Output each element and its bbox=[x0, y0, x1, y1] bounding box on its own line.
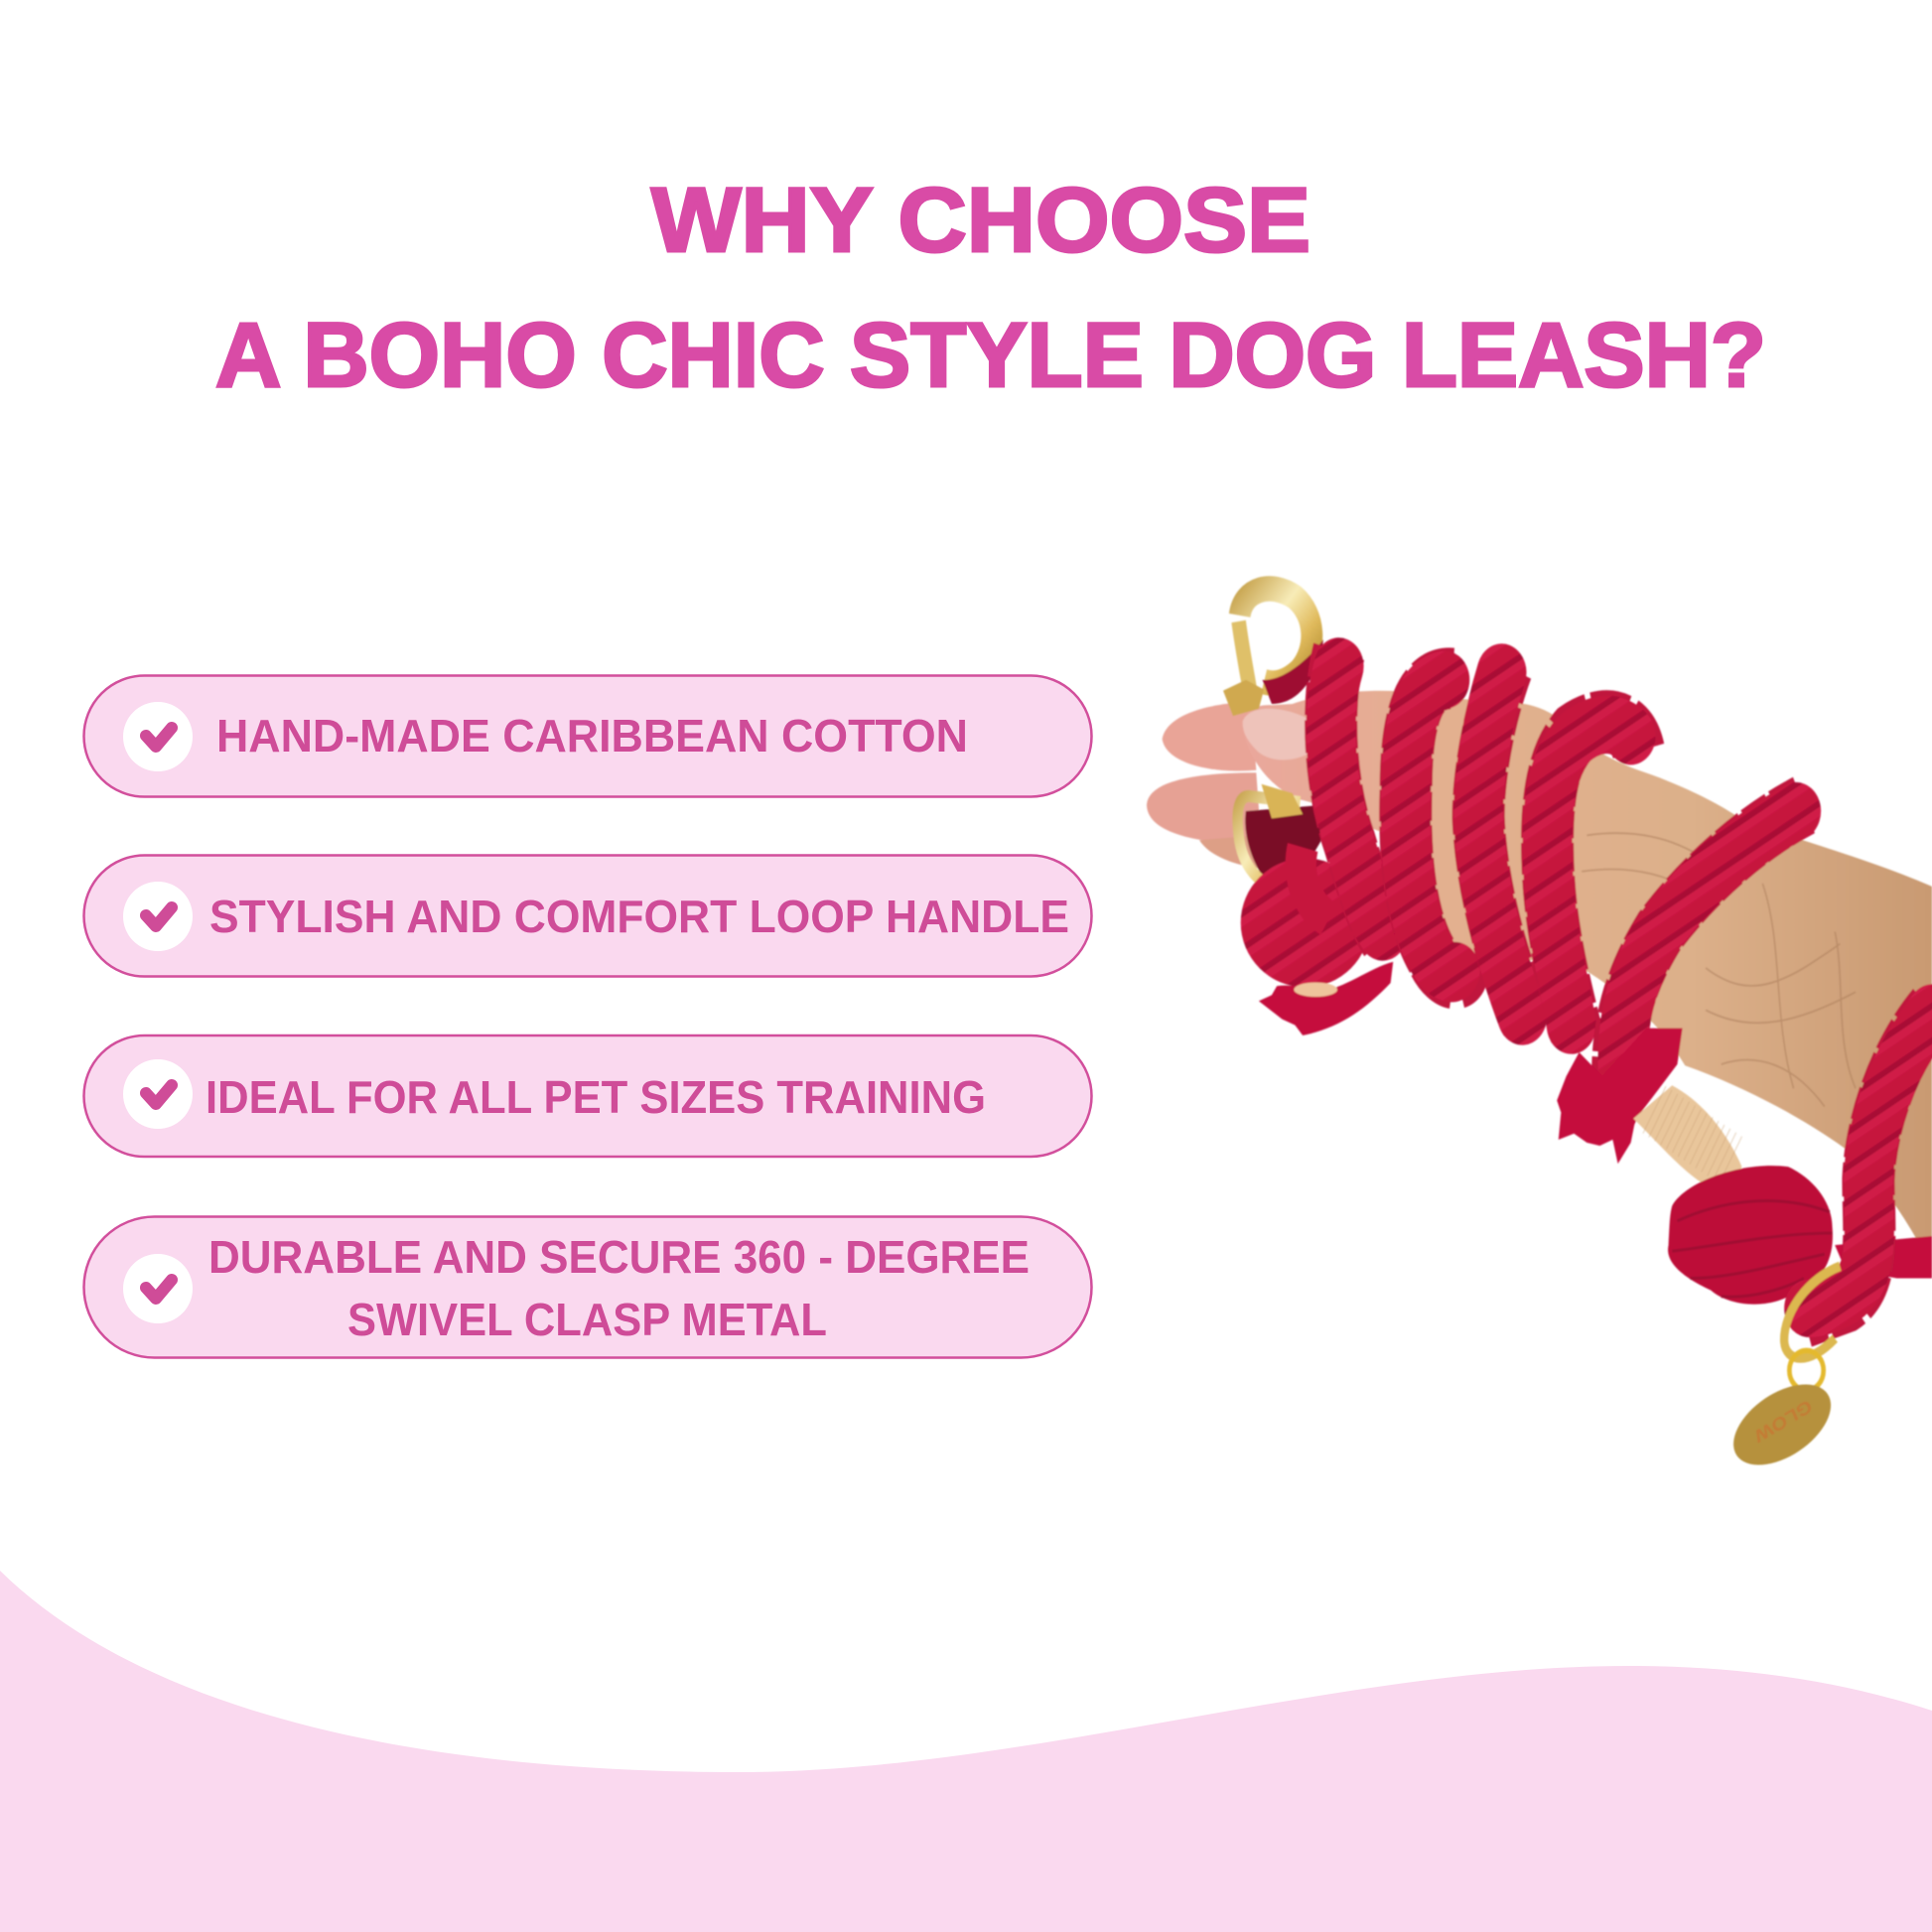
gold ring and tag bbox=[1723, 1266, 1842, 1481]
benefit pill: loop handle bbox=[83, 856, 1092, 977]
rope coil 1 bbox=[1331, 651, 1385, 938]
rope coil 5 over wrist bbox=[1618, 805, 1804, 1076]
rope coil 4 bbox=[1548, 721, 1638, 1035]
swivel D ring bbox=[1238, 784, 1320, 893]
benefit pill: cotton bbox=[83, 675, 1092, 796]
title: WHY CHOOSE bbox=[651, 170, 1311, 271]
wrinkles bbox=[1582, 833, 1856, 1107]
rope right strand bbox=[1804, 1010, 1932, 1317]
panel: benefits list bbox=[83, 675, 1092, 1358]
benefit pill: all pet sizes: IDEAL FOR ALL PET SIZES TRAINING bbox=[206, 1071, 986, 1123]
rope coil 3 bbox=[1478, 666, 1528, 1023]
benefit pill: swivel clasp: SWIVEL CLASP METAL bbox=[347, 1294, 827, 1345]
title bbox=[215, 170, 1766, 406]
rope loop left knot bbox=[1241, 848, 1393, 1035]
snap clasp bbox=[1223, 589, 1323, 716]
benefit pill: cotton: HAND-MADE CARIBBEAN COTTON bbox=[216, 710, 968, 761]
background wave bbox=[0, 1571, 1932, 1932]
thumbnail bbox=[1243, 709, 1313, 759]
rope coil 2 bbox=[1406, 678, 1462, 978]
cord wrap bbox=[1633, 1085, 1741, 1192]
hand and wrist bbox=[1147, 691, 1932, 1266]
gold ring and tag: GLOW bbox=[1751, 1396, 1815, 1447]
benefit pill: loop handle: STYLISH AND COMFORT LOOP HANDLE bbox=[209, 891, 1069, 942]
title: A BOHO CHIC STYLE DOG LEASH? bbox=[215, 305, 1766, 406]
benefit pill: swivel clasp bbox=[83, 1217, 1092, 1358]
rope knot bbox=[1668, 1166, 1833, 1305]
product photo illustration: hand with red rope leash bbox=[1147, 589, 1932, 1481]
frayed rope end bbox=[1557, 1029, 1683, 1164]
benefit pill: all pet sizes bbox=[83, 1035, 1092, 1157]
benefit pill: swivel clasp: DURABLE AND SECURE 360 - DEGREE bbox=[208, 1231, 1030, 1283]
